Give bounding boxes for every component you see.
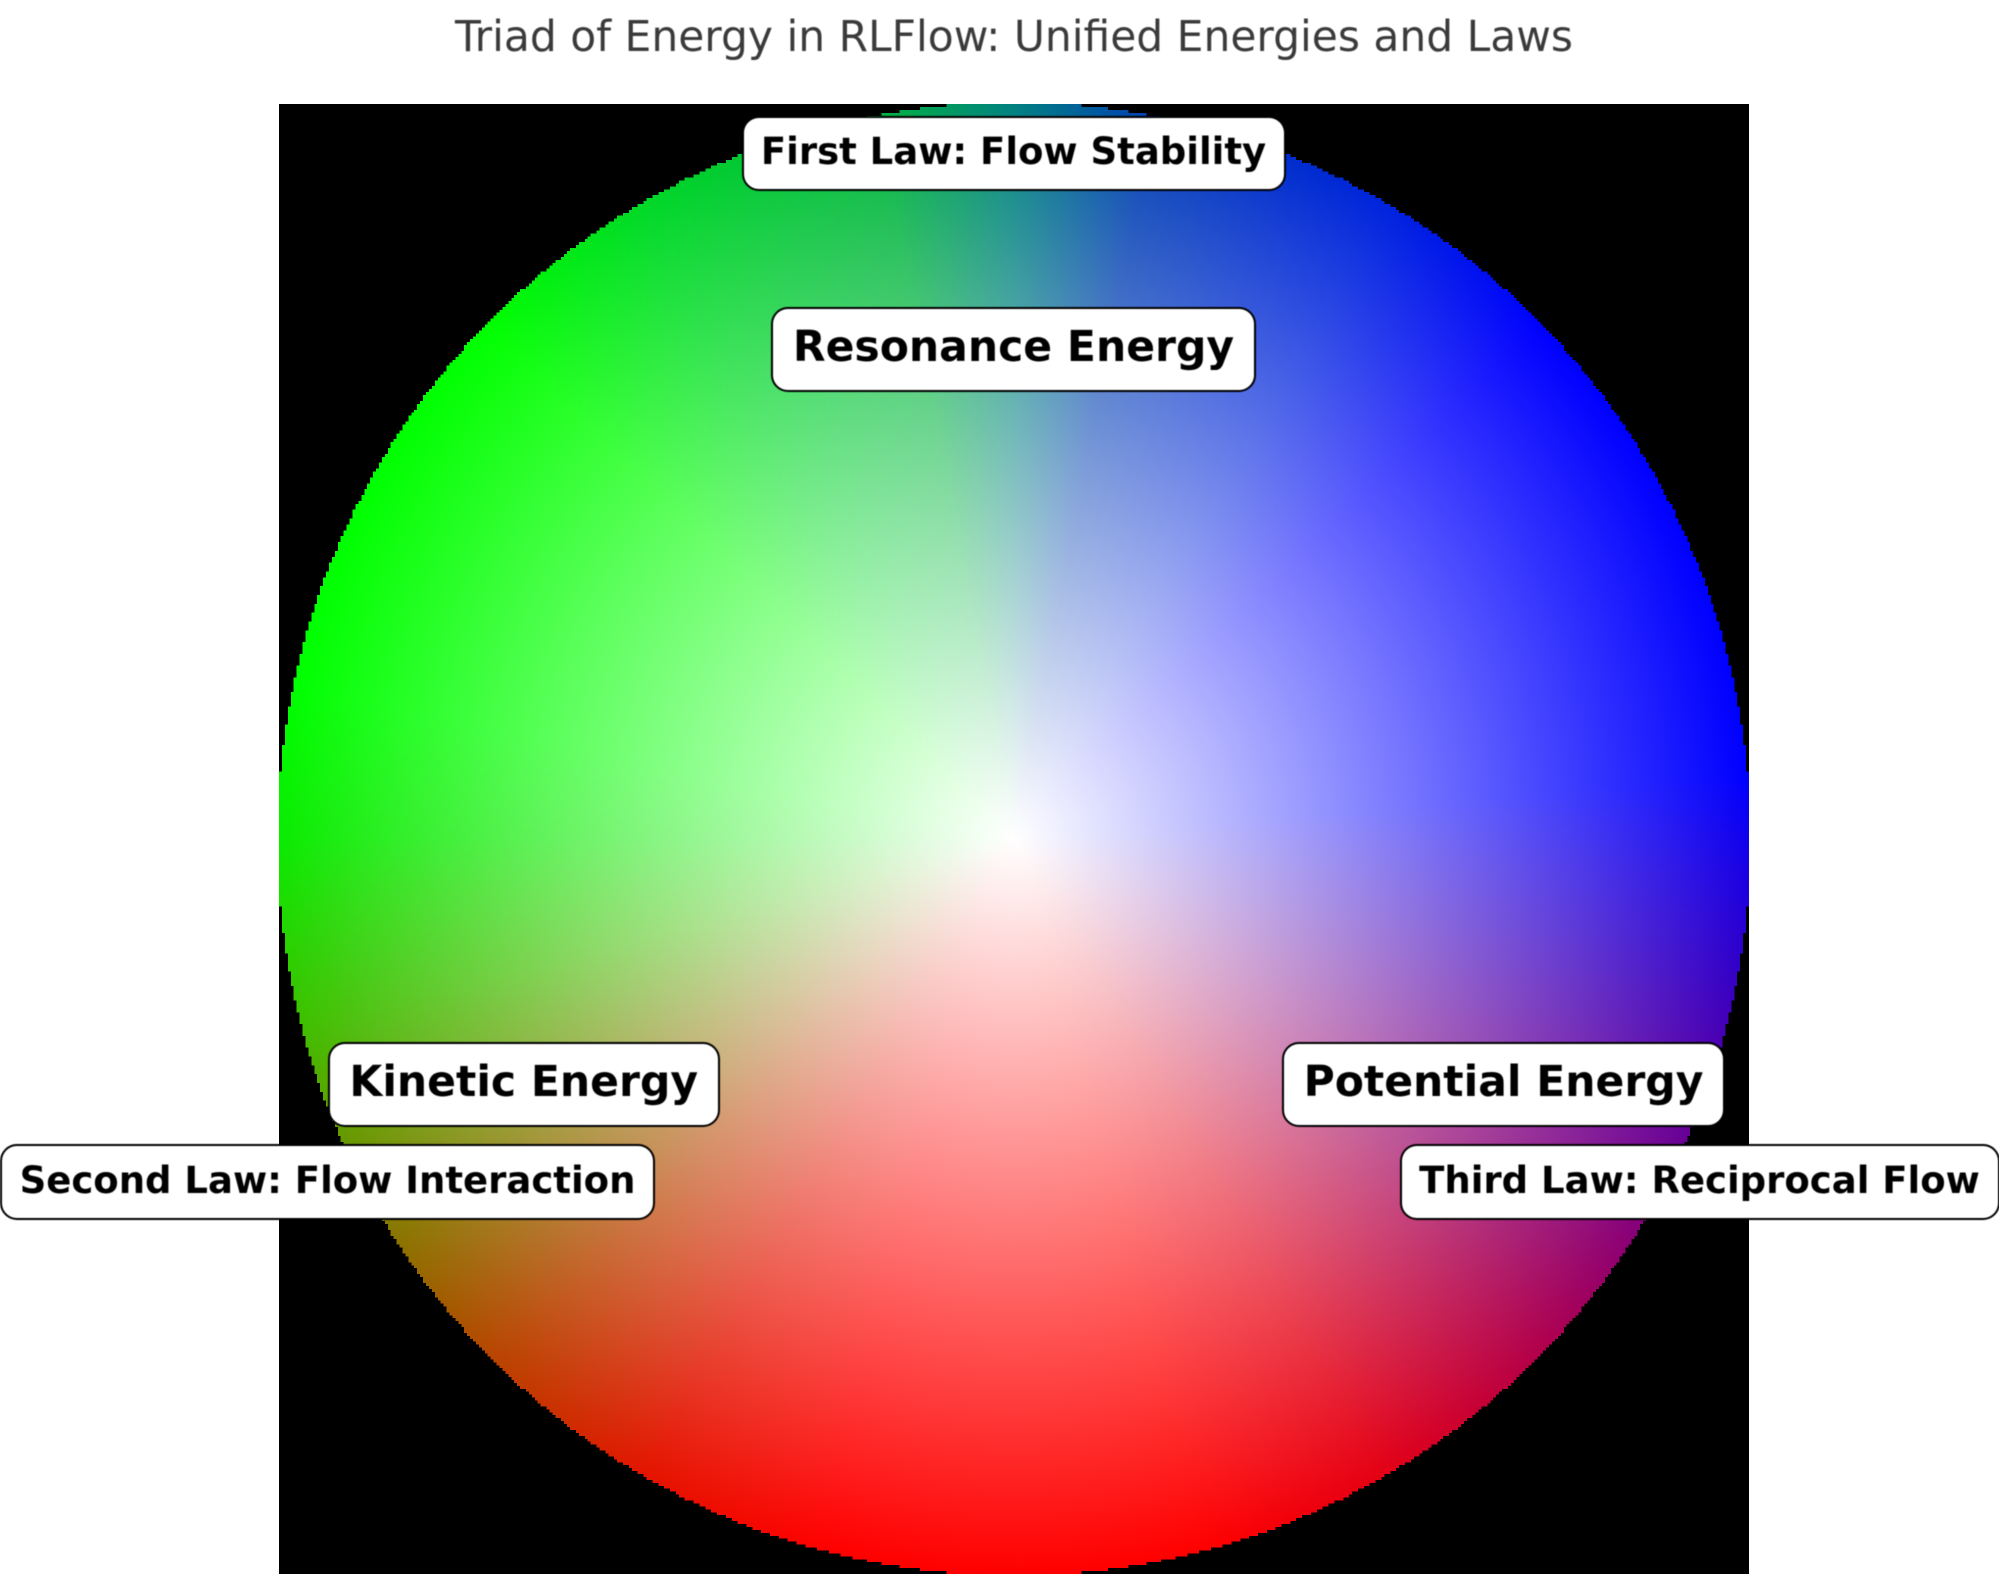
chart: RGB colour field fading to white at the centre bbox=[279, 104, 1749, 1574]
label: Third Law bbox=[1400, 1144, 1999, 1220]
label: Second Law: Second Law: Flow Interaction bbox=[20, 1158, 635, 1202]
title: Triad of Energy in RLFlow: Unified Energies and Laws bbox=[455, 12, 1573, 61]
label: Kinetic Energy bbox=[328, 1042, 720, 1126]
label: Third Law: Third Law: Reciprocal Flow bbox=[1419, 1158, 1980, 1202]
label: Kinetic Energy: Kinetic Energy bbox=[349, 1058, 698, 1107]
label: First Law bbox=[742, 116, 1286, 191]
label: First Law: First Law: Flow Stability bbox=[761, 130, 1266, 172]
label: Resonance Energy: Resonance Energy bbox=[793, 323, 1234, 372]
label: Potential Energy: Potential Energy bbox=[1304, 1058, 1703, 1107]
chart mask: stepped black corners forming the pixelated circle edge bbox=[279, 104, 1749, 1574]
panel: black square with colour wheel bbox=[279, 104, 1749, 1574]
label: Second Law bbox=[0, 1144, 655, 1220]
label: Potential Energy bbox=[1282, 1042, 1725, 1126]
label: Resonance Energy bbox=[771, 306, 1256, 392]
